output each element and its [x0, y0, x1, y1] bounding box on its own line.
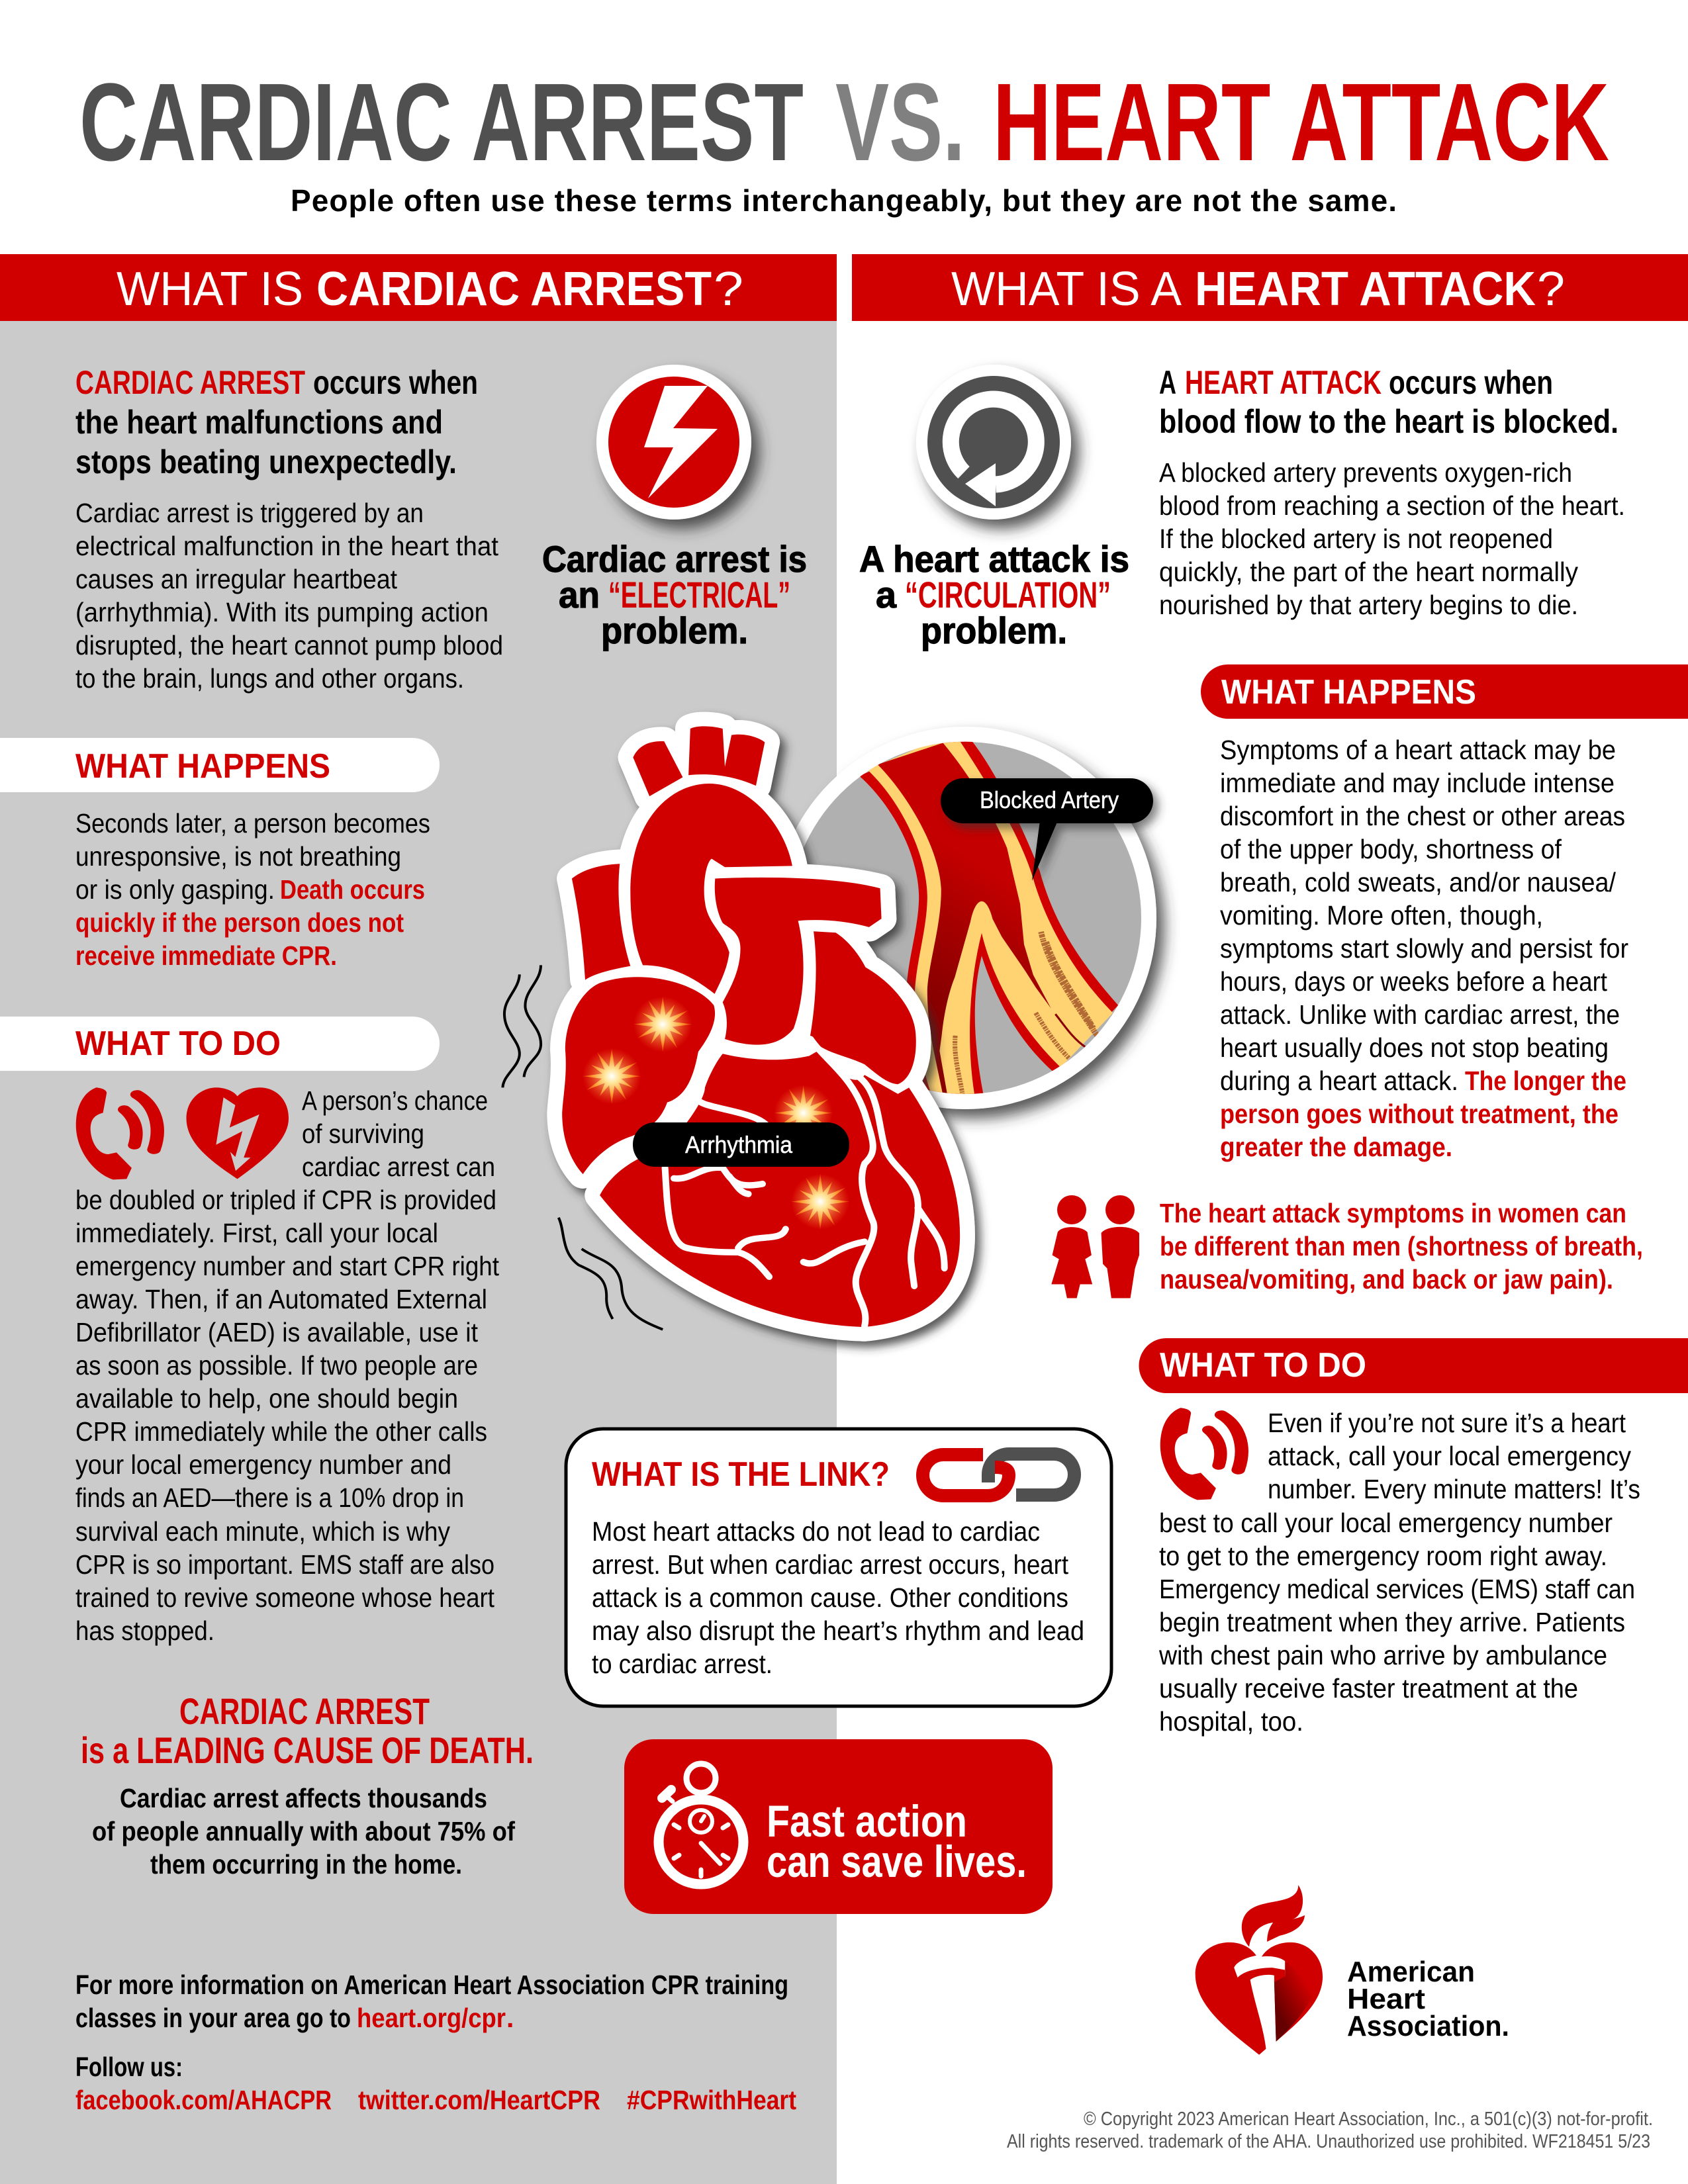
pill heading: what to do (cardiac arrest): [0, 1017, 440, 1071]
text block: what happens (heart attack): person goes without treatment, the: [1220, 1099, 1618, 1129]
text block: what happens (cardiac arrest): or is only gasping.: [75, 874, 275, 905]
text block: cardiac arrest intro body: disrupted, the heart cannot pump blood: [75, 630, 503, 660]
illustration: blocked artery circle: [774, 727, 1156, 1109]
text block: social links: #CPRwithHeart: [627, 2085, 796, 2115]
text: electrical problem: [542, 538, 807, 651]
text block: what to do (cardiac arrest): survival each minute, which is why: [75, 1516, 450, 1547]
text block: what happens (heart attack): vomiting. More often, though,: [1220, 900, 1543, 931]
text block: link body: to cardiac arrest.: [592, 1649, 773, 1679]
icon: shock lines lower left: [559, 1218, 663, 1330]
logo: american heart association: Heart: [1347, 1983, 1425, 2015]
text block: what happens (cardiac arrest): [75, 808, 430, 971]
text block: what happens (heart attack): [1220, 735, 1628, 1162]
text block: link body: [592, 1516, 1084, 1679]
heading bar: what is cardiac arrest: CARDIAC ARREST: [316, 263, 712, 316]
text block: what to do (heart attack): number. Every minute matters! It’s: [1268, 1474, 1640, 1504]
text block: what happens (cardiac arrest): Death occurs: [280, 874, 425, 905]
icon: circulation: [916, 365, 1071, 520]
label: blocked artery: Blocked Artery: [980, 786, 1119, 813]
text block: what to do (cardiac arrest): cardiac arrest can: [302, 1152, 495, 1182]
text block: what to do (cardiac arrest): your local emergency number and: [75, 1449, 451, 1480]
text block: what happens (heart attack): The longer the: [1465, 1066, 1626, 1096]
text block: more information: heart.org/cpr: [357, 2003, 506, 2033]
text block: what to do (cardiac arrest): Defibrillator (AED) is available, use it: [75, 1317, 479, 1347]
text block: social links: facebook.com/AHACPR: [75, 2085, 332, 2115]
text: circulation problem: A heart attack is: [859, 538, 1129, 580]
illustration: heart: [562, 726, 960, 1327]
text block: what happens (cardiac arrest): unresponsive, is not breathing: [75, 841, 401, 872]
text block: heart attack intro body: [1159, 457, 1625, 620]
heading bar: what is cardiac arrest: [0, 254, 837, 321]
callout: leading cause of death: of people annually with about 75% of: [92, 1816, 515, 1846]
text block: what to do (cardiac arrest): trained to revive someone whose heart: [75, 1582, 495, 1613]
text block: what happens (heart attack): of the upper body, shortness of: [1220, 834, 1562, 864]
text: electrical problem: problem.: [601, 610, 748, 651]
logo: american heart association: [1196, 1885, 1509, 2055]
text block: heart attack intro body: If the blocked artery is not reopened: [1159, 523, 1553, 554]
text block: what to do (cardiac arrest): A person’s chance: [302, 1085, 488, 1116]
text block: what to do (heart attack): begin treatment when they arrive. Patients: [1159, 1607, 1625, 1637]
text block: what happens (heart attack): hours, days or weeks before a heart: [1220, 966, 1608, 997]
text block: what to do (cardiac arrest): finds an AED—there is a 10% drop in: [75, 1482, 464, 1513]
text block: what to do (heart attack): to get to the emergency room right away.: [1159, 1541, 1607, 1571]
text block: what to do (heart attack): usually receive faster treatment at the: [1159, 1673, 1578, 1704]
heading: what is the link: WHAT IS THE LINK?: [592, 1455, 890, 1494]
panel: cardiac arrest grey background: [0, 321, 837, 2184]
text block: heart attack intro heading: occurs when: [1389, 364, 1553, 401]
icon: stopwatch: [659, 1764, 743, 1884]
text block: cardiac arrest intro heading: CARDIAC ARREST: [75, 364, 305, 401]
label: blocked artery: [941, 778, 1153, 881]
icon: phone right: [1160, 1408, 1242, 1500]
text: circulation problem: [859, 538, 1129, 651]
label: arrhythmia: Arrhythmia: [685, 1131, 793, 1158]
icon: phone: [76, 1087, 158, 1179]
icon: chain link: [923, 1454, 1074, 1496]
text block: what happens (heart attack): Symptoms of a heart attack may be: [1220, 735, 1616, 765]
icon: AED heart: [187, 1087, 289, 1179]
text block: what to do (heart attack): with chest pain who arrive by ambulance: [1158, 1640, 1607, 1670]
heading bar: what is a heart attack: [852, 254, 1688, 321]
text: circulation problem: a: [876, 574, 897, 615]
text block: heart attack intro body: blood from reaching a section of the heart.: [1159, 490, 1625, 521]
text block: link body: may also disrupt the heart’s rhythm and lead: [592, 1615, 1084, 1646]
logo: american heart association: Association.: [1347, 2010, 1509, 2042]
text block: more information: classes in your area go to: [75, 2003, 351, 2033]
heading bar: what is a heart attack: HEART ATTACK: [1195, 263, 1536, 316]
heading bar: what is a heart attack: WHAT IS A: [951, 263, 1182, 316]
text block: what to do (cardiac arrest): as soon as possible. If two people are: [75, 1350, 478, 1381]
text block: what to do (cardiac arrest): CPR immediately while the other calls: [75, 1416, 487, 1447]
text block: what happens (heart attack): during a heart attack.: [1220, 1066, 1458, 1096]
pill heading: what happens (cardiac arrest): [0, 738, 440, 792]
text block: what to do (cardiac arrest): emergency number and start CPR right: [75, 1251, 500, 1281]
text block: social links: [75, 2052, 796, 2115]
text block: what to do (cardiac arrest): immediately. First, call your local: [75, 1218, 438, 1248]
text block: what happens (heart attack): discomfort in the chest or other areas: [1220, 801, 1625, 831]
panel: what is the link: [566, 1429, 1111, 1706]
copyright: [1007, 2109, 1653, 2152]
text block: what to do (cardiac arrest): CPR is so important. EMS staff are also: [75, 1549, 494, 1580]
callout: leading cause of death: CARDIAC ARREST: [179, 1690, 430, 1732]
text block: link body: arrest. But when cardiac arrest occurs, heart: [592, 1549, 1069, 1580]
pill heading: what happens (heart attack): WHAT HAPPENS: [1221, 673, 1476, 711]
callout: leading cause of death: them occurring in the home.: [150, 1849, 462, 1880]
pill heading: what to do (heart attack): [1139, 1338, 1688, 1393]
title: VS.: [835, 61, 965, 184]
text block: what to do (heart attack): Even if you’re not sure it’s a heart: [1268, 1408, 1626, 1438]
text block: cardiac arrest intro heading: the heart malfunctions and: [75, 404, 443, 441]
text block: cardiac arrest intro body: (arrhythmia). With its pumping action: [75, 597, 489, 627]
icon: shock lines upper left: [502, 965, 541, 1087]
text block: cardiac arrest intro heading: [75, 364, 478, 480]
icon: electrical bolt: [596, 365, 751, 520]
text block: what to do (cardiac arrest): available to help, one should begin: [75, 1383, 458, 1414]
pill heading: what to do (cardiac arrest): WHAT TO DO: [75, 1024, 281, 1063]
text block: symptoms in women: The heart attack symptoms in women can: [1160, 1198, 1626, 1228]
text block: what happens (heart attack): symptoms start slowly and persist for: [1220, 933, 1628, 964]
text block: what to do (heart attack): best to call your local emergency number: [1159, 1508, 1613, 1538]
text block: cardiac arrest intro body: causes an irregular heartbeat: [75, 564, 398, 594]
text block: cardiac arrest intro body: [75, 498, 503, 694]
text block: link body: attack is a common cause. Other conditions: [592, 1582, 1068, 1613]
callout: leading cause of death: [81, 1690, 534, 1880]
text block: cardiac arrest intro body: to the brain, lungs and other organs.: [75, 663, 464, 694]
text: electrical problem: an: [559, 574, 600, 615]
text block: what to do (heart attack): attack, call your local emergency: [1268, 1441, 1631, 1471]
title: CARDIAC ARREST: [79, 61, 804, 184]
callout: leading cause of death: Cardiac arrest affects thousands: [120, 1783, 487, 1813]
text block: symptoms in women: [1160, 1198, 1643, 1295]
text block: what happens (heart attack): greater the damage.: [1220, 1132, 1452, 1162]
text block: cardiac arrest intro body: Cardiac arrest is triggered by an: [75, 498, 424, 528]
text block: what happens (heart attack): heart usually does not stop beating: [1220, 1032, 1609, 1063]
heading bar: what is cardiac arrest: ?: [714, 263, 743, 316]
text: circulation problem: problem.: [921, 610, 1067, 651]
text: fast action can save lives: Fast action: [767, 1796, 967, 1846]
text block: social links: Follow us:: [75, 2052, 183, 2082]
text block: cardiac arrest intro body: electrical malfunction in the heart that: [75, 531, 499, 561]
text block: what to do (heart attack): [1158, 1408, 1640, 1737]
text block: symptoms in women: nausea/vomiting, and back or jaw pain).: [1160, 1264, 1613, 1295]
logo: american heart association: American: [1347, 1956, 1475, 1988]
text: circulation problem: “CIRCULATION”: [905, 574, 1111, 615]
text block: what to do (cardiac arrest): be doubled or tripled if CPR is provided: [75, 1185, 496, 1215]
text block: heart attack intro heading: [1159, 364, 1618, 440]
text block: heart attack intro heading: blood flow to the heart is blocked.: [1159, 403, 1618, 440]
pill heading: what to do (heart attack): WHAT TO DO: [1160, 1346, 1366, 1385]
text block: what happens (cardiac arrest): receive immediate CPR.: [75, 940, 337, 971]
text block: what happens (heart attack): breath, cold sweats, and/or nausea/: [1220, 867, 1617, 897]
text block: what to do (heart attack): hospital, too.: [1159, 1706, 1303, 1737]
pill heading: what happens (heart attack): [1201, 664, 1688, 719]
text: electrical problem: “ELECTRICAL”: [608, 574, 790, 615]
text block: cardiac arrest intro heading: stops beating unexpectedly.: [75, 443, 457, 480]
title: [79, 61, 1609, 184]
text block: what to do (cardiac arrest): [75, 1085, 500, 1646]
text block: cardiac arrest intro heading: occurs when: [313, 364, 478, 401]
heading bar: what is cardiac arrest: WHAT IS: [117, 263, 303, 316]
pill heading: what happens (cardiac arrest): WHAT HAPPENS: [75, 747, 330, 786]
text block: what happens (heart attack): immediate and may include intense: [1220, 768, 1615, 798]
text block: what to do (cardiac arrest): of surviving: [302, 1118, 424, 1149]
text block: more information: For more information on American Heart Association CPR training: [75, 1970, 788, 2000]
subtitle: People often use these terms interchangeably, but they are not the same.: [291, 183, 1397, 218]
text block: what happens (cardiac arrest): Seconds later, a person becomes: [75, 808, 430, 839]
icon: woman and man: [1051, 1195, 1139, 1298]
text block: heart attack intro heading: A: [1159, 364, 1176, 401]
text: fast action can save lives: can save lives.: [767, 1837, 1027, 1887]
text block: social links: twitter.com/HeartCPR: [358, 2085, 600, 2115]
heading bar: what is a heart attack: ?: [1537, 263, 1565, 316]
text block: link body: Most heart attacks do not lead to cardiac: [592, 1516, 1040, 1547]
text block: what to do (heart attack): Emergency medical services (EMS) staff can: [1159, 1574, 1635, 1604]
text block: more information: .: [506, 2003, 514, 2033]
text block: what to do (cardiac arrest): away. Then, if an Automated External: [75, 1284, 487, 1314]
callout: leading cause of death: is a LEADING CAUSE OF DEATH.: [81, 1729, 534, 1771]
text block: what happens (heart attack): attack. Unlike with cardiac arrest, the: [1220, 999, 1620, 1030]
text block: what happens (cardiac arrest): quickly if the person does not: [75, 907, 404, 938]
text block: heart attack intro body: quickly, the part of the heart normally: [1159, 557, 1578, 587]
text block: heart attack intro heading: HEART ATTACK: [1185, 364, 1382, 401]
text: electrical problem: Cardiac arrest is: [542, 538, 807, 580]
text: fast action can save lives: [767, 1796, 1027, 1887]
label: arrhythmia: [633, 1122, 849, 1167]
text block: heart attack intro body: nourished by that artery begins to die.: [1159, 590, 1578, 620]
text block: heart attack intro body: A blocked artery prevents oxygen-rich: [1159, 457, 1572, 488]
text block: more information: [75, 1970, 788, 2033]
text block: what to do (cardiac arrest): has stopped.: [75, 1615, 214, 1646]
panel: fast action: [624, 1739, 1053, 1914]
